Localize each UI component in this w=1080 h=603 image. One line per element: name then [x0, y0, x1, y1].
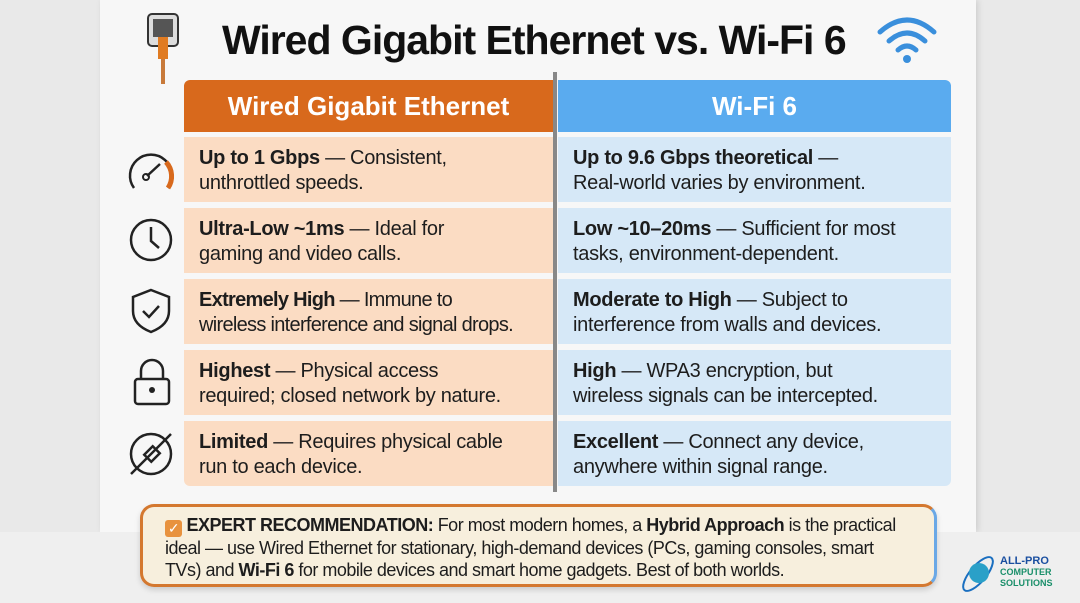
checkbox icon: ✓ [168, 520, 179, 536]
row 5 wifi: anywhere within signal range. [573, 456, 828, 478]
row 4 wifi [558, 350, 951, 415]
callout: expert recommendation: ideal — use Wired Ethernet for stationary, high-demand devices (PCs, gaming consoles, smart [165, 538, 874, 558]
row 1 wired: Up to 1 Gbps — Consistent, [199, 147, 447, 169]
row 4 wired: Highest — Physical access [199, 360, 438, 382]
icon: ethernet port [147, 13, 179, 84]
icon: wifi [878, 17, 936, 63]
icon: unplugged [130, 432, 172, 476]
row 3 wired [184, 279, 553, 344]
row 4 wired [184, 350, 553, 415]
logo: COMPUTER [1000, 567, 1052, 577]
row 4 wifi: High — WPA3 encryption, but [573, 360, 832, 382]
background wall card [100, 0, 976, 532]
row 3 wifi: interference from walls and devices. [573, 314, 881, 336]
callout: expert recommendation: TVs) and Wi-Fi 6 for mobile devices and smart home gadgets. Best of both worlds. [165, 560, 784, 580]
row 1 wifi: Real-world varies by environment. [573, 172, 865, 194]
header: wired [184, 80, 553, 132]
row 5 wifi: Excellent — Connect any device, [573, 431, 864, 453]
row 5 wired: run to each device. [199, 456, 362, 478]
row 4 wifi: wireless signals can be intercepted. [573, 385, 878, 407]
row 4 wired: required; closed network by nature. [199, 385, 501, 407]
icon: shield [132, 288, 170, 334]
row 3 wifi [558, 279, 951, 344]
row 1 wifi: Up to 9.6 Gbps theoretical — [573, 147, 838, 169]
title: Wired Gigabit Ethernet vs. Wi-Fi 6 [222, 17, 846, 63]
checkbox icon [165, 520, 182, 537]
row 2 wifi [558, 208, 951, 273]
logo [962, 555, 1053, 592]
header: wifi: Wi-Fi 6 [712, 91, 797, 121]
row 2 wifi: Low ~10–20ms — Sufficient for most [573, 218, 895, 240]
row 1 wifi [558, 137, 951, 202]
row 5 wired [184, 421, 553, 486]
row 2 wifi: tasks, environment-dependent. [573, 243, 839, 265]
icon: clock [130, 218, 172, 262]
logo: ALL-PRO [1000, 555, 1049, 567]
row 3 wifi: Moderate to High — Subject to [573, 289, 848, 311]
row 1 wired: unthrottled speeds. [199, 172, 363, 194]
row 1 wired [184, 137, 553, 202]
row 2 wired: Ultra-Low ~1ms — Ideal for [199, 218, 444, 240]
header: wifi [558, 80, 951, 132]
row 2 wired: gaming and video calls. [199, 243, 401, 265]
row 3 wired: Extremely High — Immune to [199, 289, 452, 311]
divider [553, 72, 557, 492]
icon: speedometer [128, 153, 174, 190]
row 5 wifi [558, 421, 951, 486]
callout: expert recommendation: EXPERT RECOMMENDATION: For most modern homes, a Hybrid Approach is the practical [187, 515, 896, 535]
callout: expert recommendation [140, 504, 937, 587]
header: wired: Wired Gigabit Ethernet [228, 91, 509, 121]
icon: padlock [134, 358, 170, 406]
row 5 wired: Limited — Requires physical cable [199, 431, 503, 453]
logo: SOLUTIONS [1000, 578, 1053, 588]
row 2 wired [184, 208, 553, 273]
row 3 wired: wireless interference and signal drops. [199, 314, 513, 336]
